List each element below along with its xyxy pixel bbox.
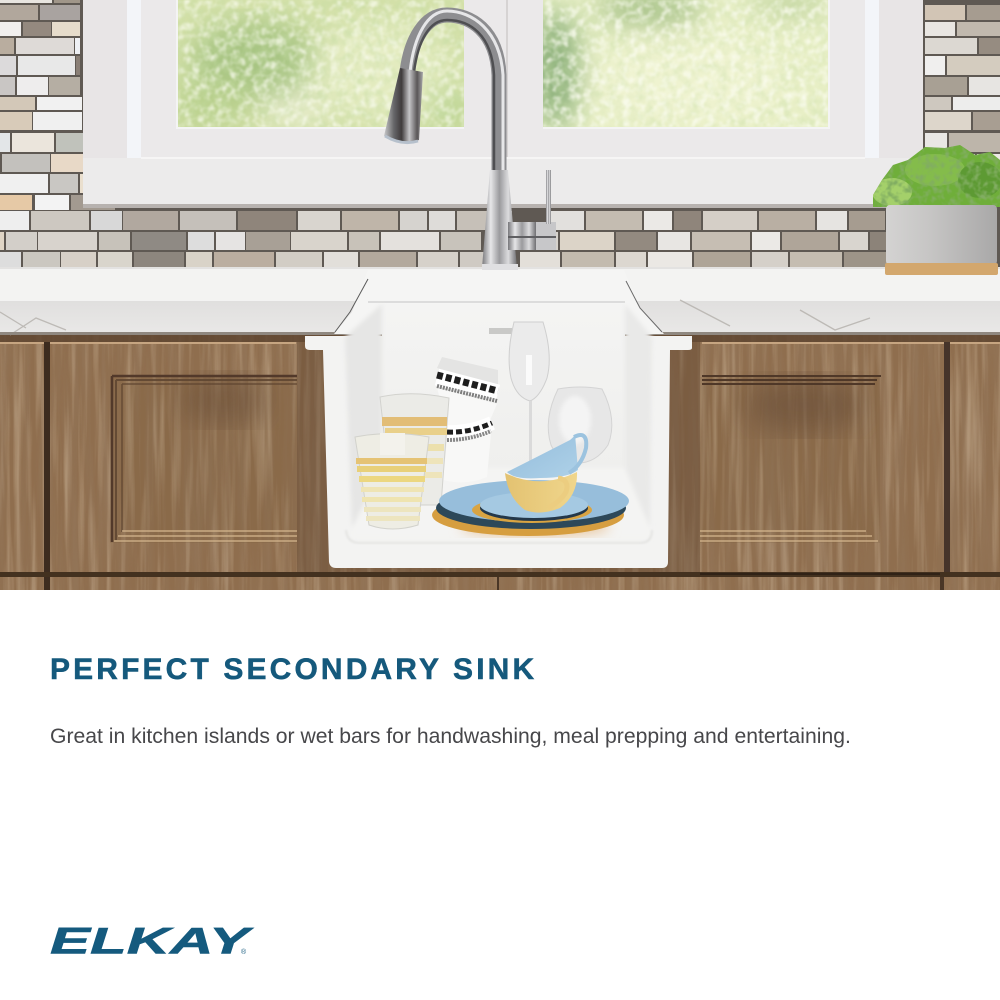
plate stack <box>432 480 629 536</box>
countertop <box>0 267 1000 335</box>
backsplash tile wall <box>0 0 1000 270</box>
logo: Elkay: ELKAY <box>50 920 254 962</box>
left cabinet door <box>110 375 297 543</box>
yellow bowl <box>505 472 577 513</box>
left window view: green foliage <box>170 0 472 132</box>
wooden tray <box>885 263 998 275</box>
white stacked cups <box>437 357 498 482</box>
cabinets <box>0 335 1000 590</box>
right cabinet door <box>700 376 940 574</box>
sink <box>305 270 692 568</box>
potted plant <box>872 145 1000 275</box>
photo: kitchen sink scene <box>0 0 1000 590</box>
window frame <box>83 0 923 208</box>
body text: Great in kitchen islands or wet bars for handwashing, meal prepping and entertaining. <box>50 725 851 748</box>
plant leaves <box>872 145 1000 207</box>
heading: PERFECT SECONDARY SINK <box>50 653 537 686</box>
goblet glass <box>548 387 612 463</box>
sink basin opening <box>334 270 664 334</box>
logo: Elkay: ® <box>241 948 247 956</box>
front tumbler glass with yellow stripes <box>355 433 429 529</box>
wine glass <box>509 322 549 466</box>
grey pot <box>886 205 997 265</box>
blue tilted cup <box>507 434 586 478</box>
back tumbler glass with yellow stripes <box>380 394 449 505</box>
faucet <box>384 11 556 270</box>
right window view: green foliage <box>530 0 830 130</box>
logo: Elkay <box>50 920 254 962</box>
